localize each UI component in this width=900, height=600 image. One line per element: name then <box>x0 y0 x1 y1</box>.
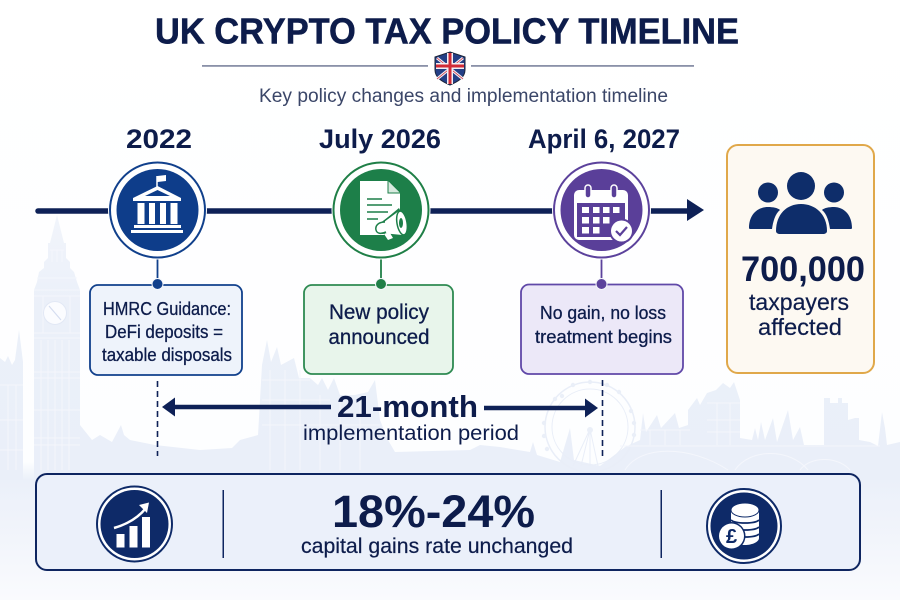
callout: no gain, no loss: No gain, no loss <box>540 302 666 323</box>
icon: pound coins: £ <box>726 526 737 548</box>
icon: people <box>749 172 852 234</box>
icon: rising chart <box>97 486 172 562</box>
label: taxpayers affected <box>749 289 849 340</box>
callout: HMRC guidance <box>90 278 242 375</box>
connector <box>380 258 382 284</box>
callout: new policy announced <box>304 278 453 374</box>
timeline arrow <box>38 199 704 221</box>
stat: 18%-24%: 18%-24% <box>332 486 535 537</box>
callout: no gain, no loss <box>521 278 683 374</box>
title divider with shield <box>202 52 694 85</box>
label: implementation period: implementation period <box>303 422 519 445</box>
title: UK CRYPTO TAX POLICY TIMELINE <box>155 10 739 52</box>
background: London skyline <box>0 215 900 480</box>
callout: HMRC guidance: HMRC Guidance: <box>103 298 231 319</box>
milestone: July 2026 <box>304 124 453 374</box>
implementation period span <box>158 380 602 456</box>
year label 2022: 2022 <box>126 124 192 154</box>
panel: capital gains rate <box>36 474 860 570</box>
label: capital gains rate unchanged: capital gains rate unchanged <box>301 535 573 558</box>
connector <box>600 258 602 284</box>
icon: document and megaphone <box>332 160 430 260</box>
callout: new policy announced: New policy <box>329 301 429 324</box>
label: 21-month: 21-month <box>337 389 478 424</box>
milestone: April 6, 2027 <box>521 124 683 374</box>
year label July 2026: July 2026 <box>319 124 441 154</box>
icon: union flag shield <box>435 52 465 85</box>
divider <box>222 490 224 558</box>
callout: HMRC guidance: taxable disposals <box>102 344 232 365</box>
callout: HMRC guidance: DeFi deposits = <box>105 321 223 342</box>
divider <box>660 490 662 558</box>
milestone: 2022 <box>90 124 242 375</box>
label: taxpayers affected: taxpayers <box>749 289 849 315</box>
year label April 6, 2027: April 6, 2027 <box>528 124 680 154</box>
connector <box>156 258 158 284</box>
callout: new policy announced: announced <box>328 326 430 349</box>
icon: pound coins <box>707 489 781 563</box>
callout: no gain, no loss: treatment begins <box>535 326 672 347</box>
label: taxpayers affected: affected <box>758 314 842 340</box>
panel: 700,000 taxpayers affected <box>727 145 874 373</box>
stat: 700,000: 700,000 <box>741 250 865 289</box>
icon: government building <box>108 160 207 260</box>
icon: calendar with check <box>552 160 651 260</box>
subtitle: Key policy changes and implementation timeline <box>259 86 668 107</box>
